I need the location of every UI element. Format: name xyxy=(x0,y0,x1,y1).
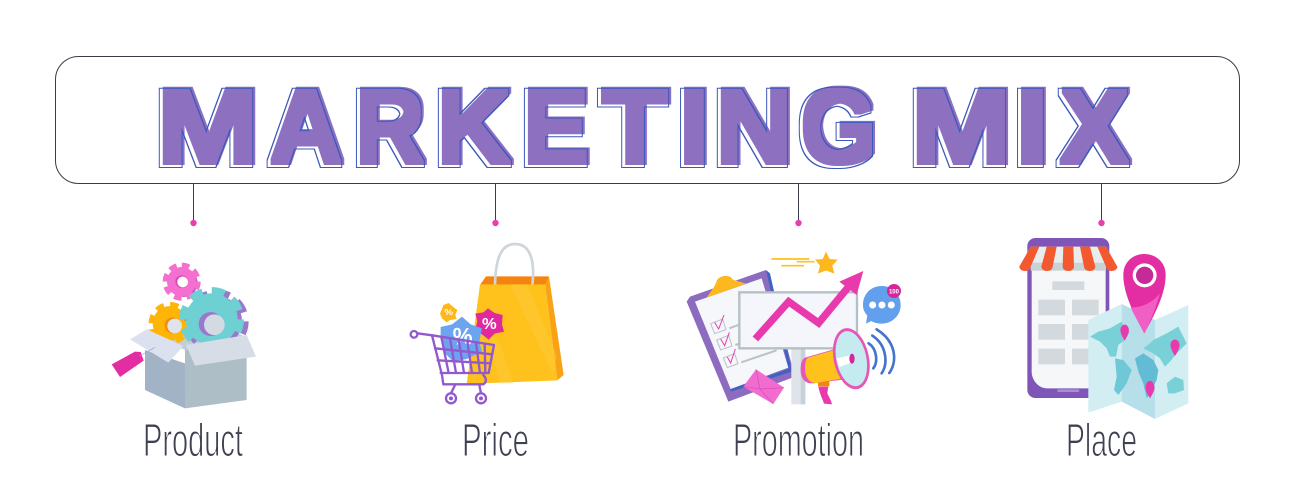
growth arrow xyxy=(755,271,863,339)
title: MARKETING MIX: N xyxy=(714,70,791,187)
icon: promotion billboard, clipboard and megaphone xyxy=(687,252,901,404)
title frame xyxy=(56,56,1240,184)
phone screen xyxy=(1032,255,1106,388)
envelope xyxy=(743,369,784,404)
connector: Product xyxy=(190,184,197,226)
speed lines xyxy=(771,259,815,266)
title: MARKETING MIX: E xyxy=(521,70,588,187)
orange gear xyxy=(151,305,189,342)
box interior xyxy=(145,321,247,350)
title: MARKETING MIX: M xyxy=(154,70,258,187)
icon: shopping bag and cart xyxy=(411,244,564,403)
icon: storefront phone and map xyxy=(1019,238,1188,419)
label: Promotion: Promotion xyxy=(733,414,864,466)
small discount badge: % xyxy=(444,307,453,317)
connector: Place xyxy=(1098,184,1105,226)
blue discount badge xyxy=(441,317,482,362)
title: MARKETING MIX: T xyxy=(600,70,666,187)
chat bubble xyxy=(863,284,901,324)
label: Price: Price xyxy=(462,414,529,466)
icon: product box with gears xyxy=(112,265,256,408)
label: Product: Product xyxy=(143,414,243,466)
title: MARKETING MIX: X xyxy=(1058,70,1127,187)
checklist xyxy=(711,315,777,368)
megaphone xyxy=(801,325,875,404)
chat bubble: 100 xyxy=(889,289,900,295)
clipboard xyxy=(687,270,795,402)
connector: Promotion xyxy=(795,184,802,226)
bag front xyxy=(467,284,557,384)
billboard xyxy=(739,292,857,348)
box left side xyxy=(145,350,185,408)
pink discount badge: % xyxy=(482,316,497,333)
bag highlights xyxy=(487,284,557,384)
connector: Price xyxy=(492,184,499,226)
price tag xyxy=(112,347,155,377)
box right side xyxy=(185,337,247,408)
title: MARKETING MIX: R xyxy=(354,70,423,187)
pink discount badge xyxy=(475,308,504,340)
left flap xyxy=(130,329,183,363)
location pin xyxy=(1123,254,1166,333)
folded map xyxy=(1088,304,1188,419)
map pins xyxy=(1120,325,1180,398)
sound waves xyxy=(869,329,894,373)
continents xyxy=(1090,322,1187,398)
label: Place: Place xyxy=(1066,414,1137,466)
shopping cart xyxy=(411,331,494,403)
phone content xyxy=(1038,281,1099,364)
pink gear xyxy=(165,265,198,298)
title: MARKETING MIX: I xyxy=(1012,70,1049,187)
bag handle xyxy=(495,244,533,297)
blue discount badge: % xyxy=(453,323,473,350)
teal gear xyxy=(183,291,245,349)
title: MARKETING MIX: M xyxy=(909,70,1010,187)
title: MARKETING MIX: K xyxy=(435,70,509,187)
small discount badge xyxy=(440,303,457,322)
star xyxy=(815,252,838,274)
phone body xyxy=(1027,238,1109,398)
title: MARKETING MIX: I xyxy=(676,70,709,187)
title: MARKETING MIX: A xyxy=(268,70,341,187)
title: MARKETING MIX xyxy=(154,70,1127,187)
title: MARKETING MIX: G xyxy=(799,70,875,187)
billboard pole xyxy=(791,348,805,404)
clipboard clip xyxy=(707,276,746,298)
bag inner back xyxy=(480,276,549,285)
bag side xyxy=(545,276,564,380)
storefront awning xyxy=(1019,247,1117,271)
right flap xyxy=(186,335,256,366)
phone home bar xyxy=(1057,389,1079,392)
